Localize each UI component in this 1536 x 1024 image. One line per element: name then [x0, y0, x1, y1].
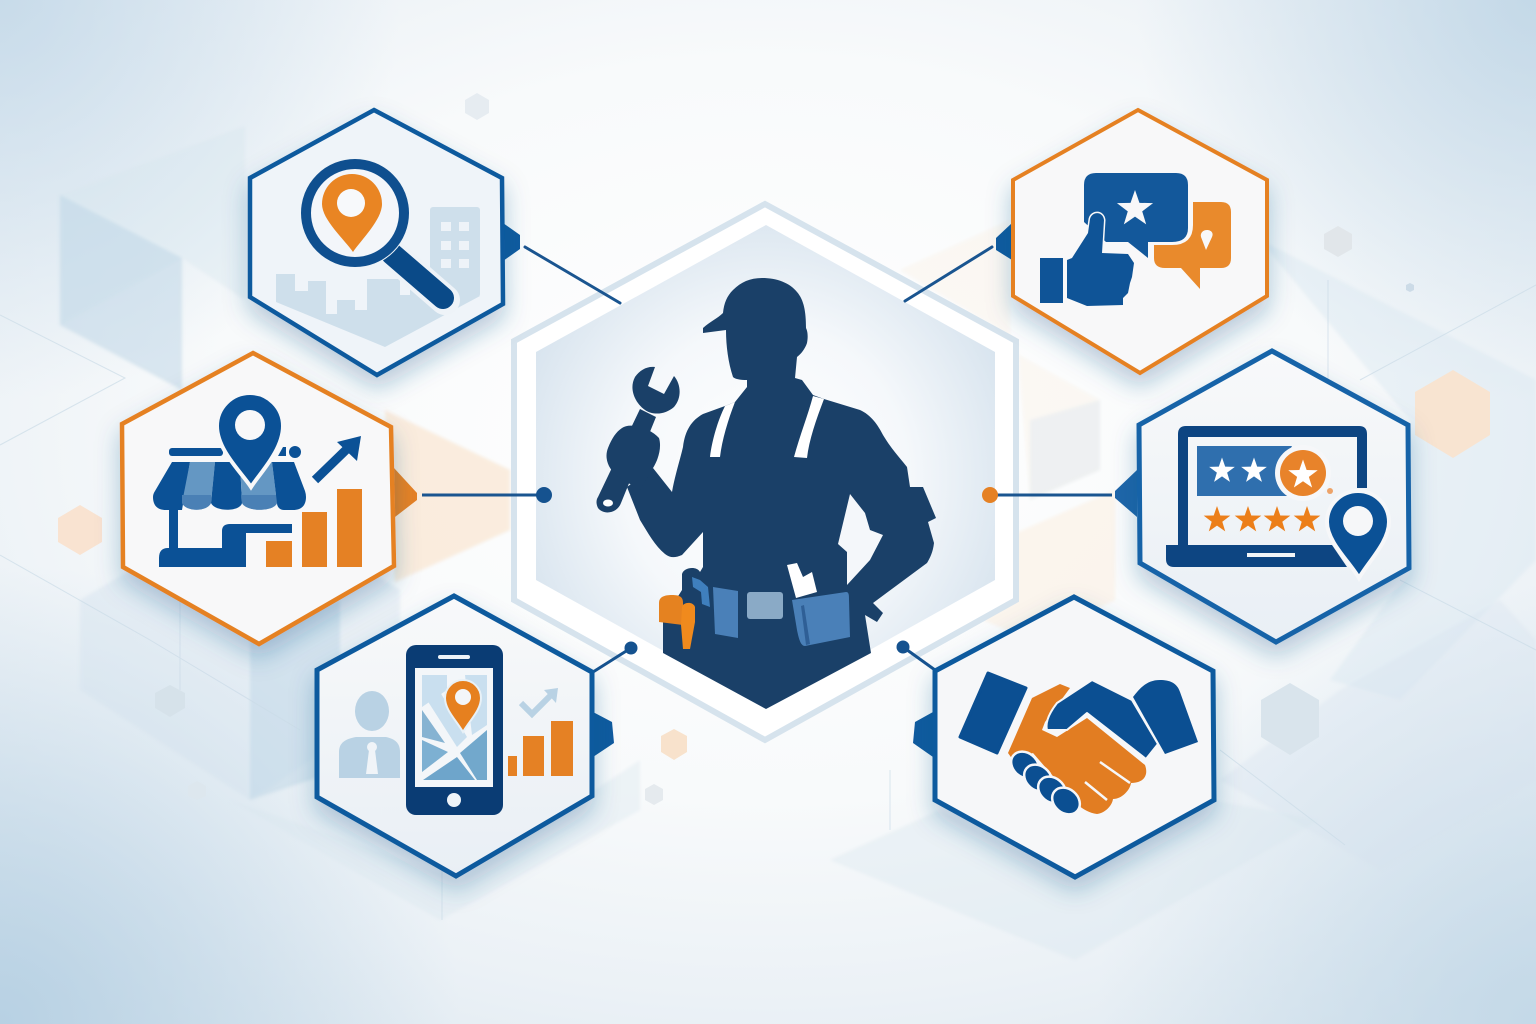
connector: storefront to centre: [422, 487, 552, 503]
panel: reviews: [996, 110, 1267, 373]
panel: online reviews laptop: [1115, 351, 1409, 642]
white shoulder straps: [710, 396, 824, 458]
tool belt: [659, 563, 850, 649]
panel: handshake: [913, 597, 1214, 877]
icon: smartphone map: [406, 645, 503, 815]
connector: laptop to centre: [982, 487, 1112, 503]
bar chart: growth: [266, 489, 362, 567]
hexagon frame: mobile map: [317, 596, 592, 876]
icon: storefront: [153, 446, 306, 567]
panel: local search: [250, 110, 520, 375]
gap between arm and torso: [838, 494, 883, 585]
icon: growth arrow: [315, 436, 361, 480]
icon: customer person: [339, 691, 400, 778]
icon: blue speech bubble with star: [1084, 173, 1188, 258]
tab: mobile panel connector: [593, 712, 614, 757]
connector: search to centre: [525, 247, 620, 303]
tab: laptop connector: [1115, 470, 1137, 517]
tab: search panel connector: [503, 223, 520, 261]
icon: laptop location pin: [1327, 491, 1389, 578]
tab: handshake connector: [913, 712, 933, 757]
panel: central hexagon with tradesperson: [514, 204, 1016, 740]
wrench: [596, 367, 680, 512]
panel: mobile map: [317, 596, 614, 876]
connector: reviews to centre: [905, 247, 992, 301]
icon: city skyline: [276, 207, 480, 347]
hexagon frame: online reviews: [1139, 351, 1409, 642]
tab: reviews connector: [996, 223, 1012, 260]
hexagon frame: local search: [250, 110, 503, 375]
icon: rating card: [1197, 445, 1333, 501]
connector: handshake to centre: [896, 640, 935, 670]
connector: phone to centre: [593, 642, 638, 672]
bar chart: mobile growth: [508, 721, 573, 776]
hexagon frame: reviews: [1013, 110, 1267, 373]
icon: orange speech bubble: [1154, 202, 1231, 289]
icon: thumbs up: [1040, 213, 1134, 306]
icon: location pin: [217, 393, 283, 487]
icon: orange star row: [1204, 506, 1320, 531]
icon: handshake: [960, 673, 1198, 820]
hexagon frame: storefront growth: [122, 353, 394, 644]
icon: rising check arrow: [521, 688, 558, 714]
hand gripping wrench: [606, 426, 660, 490]
tab: storefront connector: [394, 468, 417, 517]
figure: tradesperson silhouette: [596, 278, 936, 709]
hexagon frame: handshake: [935, 597, 1214, 877]
icon: laptop: [1166, 426, 1367, 567]
panel: storefront growth: [122, 353, 417, 644]
icon: magnifying glass with pin: [300, 158, 445, 300]
